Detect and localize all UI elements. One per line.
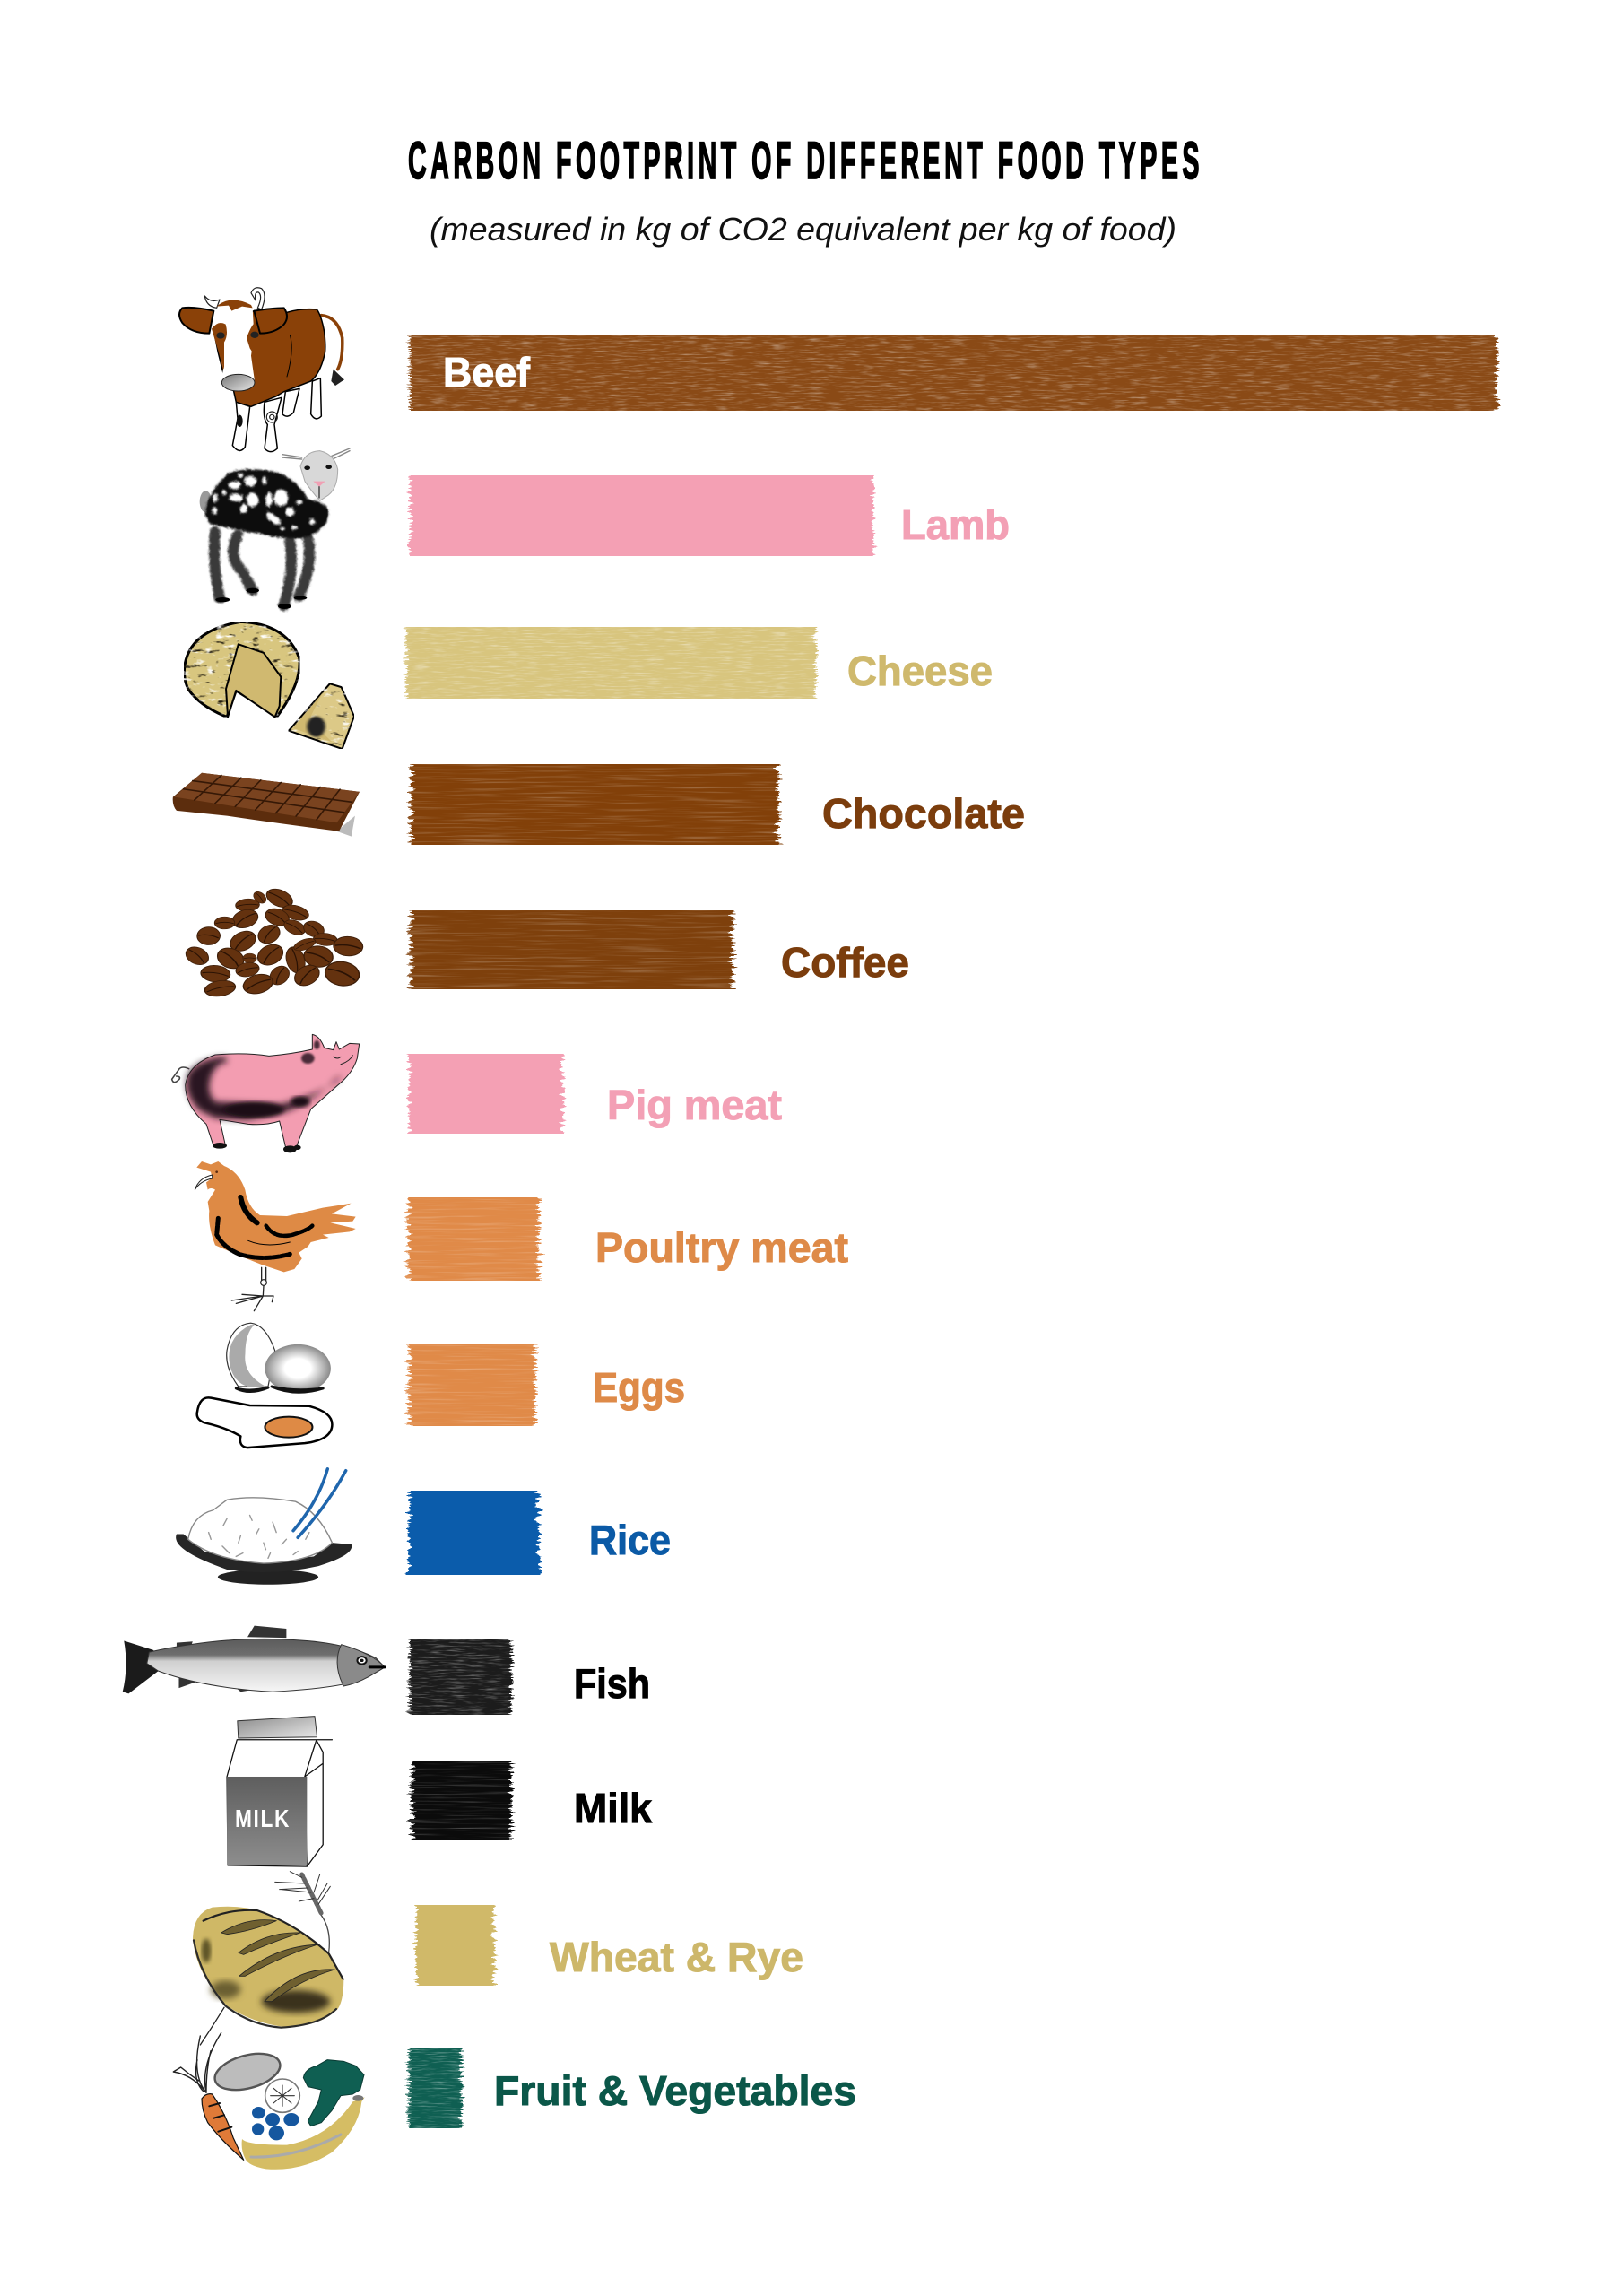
bar: rice	[409, 1491, 539, 1575]
icon: milk carton	[227, 1717, 332, 1866]
icon: eggs	[197, 1323, 332, 1448]
label: milk: Milk	[574, 1785, 652, 1831]
bar: coffee	[411, 910, 733, 989]
label: beef: Beef	[443, 349, 531, 396]
bar: cheese	[406, 627, 816, 699]
icon: fish	[123, 1626, 385, 1693]
icon: sheep	[200, 448, 350, 609]
label: fish: Fish	[574, 1660, 650, 1707]
icon: cheese	[184, 622, 354, 749]
bar: pig meat	[409, 1054, 563, 1134]
icon: coffee beans	[181, 885, 365, 999]
bar: wheat and rye	[416, 1905, 494, 1986]
bar chart	[406, 335, 1497, 2128]
label: cheese: Cheese	[847, 648, 993, 694]
icon: hen	[195, 1161, 356, 1311]
bar: milk	[412, 1761, 511, 1840]
bar: poultry meat	[408, 1197, 539, 1281]
label: pig meat: Pig meat	[607, 1082, 782, 1128]
icon: rice bowl	[176, 1469, 352, 1585]
label: chocolate: Chocolate	[822, 790, 1025, 837]
label: rice: Rice	[589, 1517, 671, 1563]
icon: wheat and bread	[193, 1872, 343, 2045]
bar: fish	[410, 1639, 511, 1715]
bar: fruit and vegetables	[409, 2048, 462, 2128]
label: poultry meat: Poultry meat	[595, 1224, 848, 1271]
icon: chocolate bar	[173, 773, 360, 837]
label: coffee: Coffee	[781, 939, 909, 986]
milk carton lettering: MILK	[235, 1805, 291, 1832]
bar: chocolate	[411, 764, 778, 845]
bar: eggs	[409, 1344, 535, 1426]
label: wheat and rye: Wheat & Rye	[550, 1934, 803, 1980]
icon: cow	[179, 288, 344, 452]
bar: lamb	[410, 475, 873, 556]
label: lamb: Lamb	[901, 501, 1010, 548]
label: eggs: Eggs	[593, 1364, 685, 1411]
icon: fruit and vegetables	[173, 2033, 365, 2170]
label: fruit and vegetables: Fruit & Vegetables	[494, 2067, 856, 2114]
icon: pig	[172, 1034, 360, 1152]
bar: beef	[410, 335, 1497, 411]
subtitle: (measured in kg of CO2 equivalent per kg of food)	[430, 211, 1176, 248]
